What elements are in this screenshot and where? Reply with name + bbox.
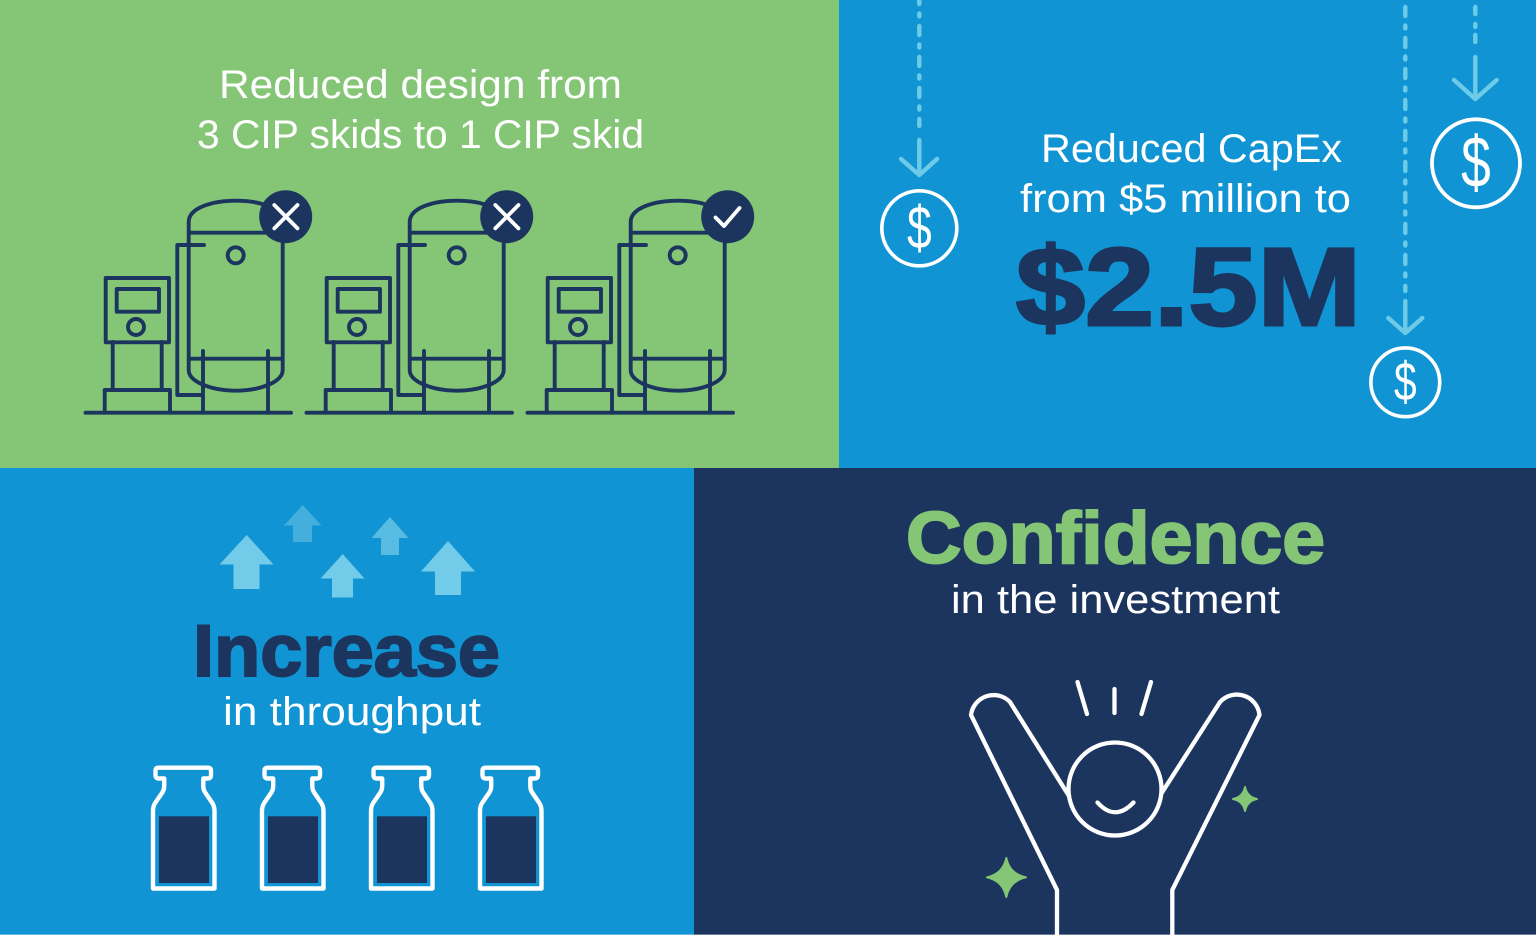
icon: CIP skid 1 crossed out xyxy=(86,190,312,413)
text: reduced CapEx: Reduced CapEx xyxy=(1041,127,1342,171)
heading: reduced design: Reduced design from xyxy=(219,63,622,107)
bottle 1 xyxy=(153,768,214,888)
text: reduced CapEx: from $5 million to xyxy=(1020,177,1351,221)
panel: confidence in the investment xyxy=(694,468,1536,935)
text: reduced CapEx xyxy=(1020,127,1351,221)
panel: increase in throughput xyxy=(0,468,694,935)
bottle 2 xyxy=(262,768,324,888)
arrow: falling right xyxy=(1454,7,1497,99)
text: in the investment: in the investment xyxy=(951,578,1280,622)
heading: reduced design xyxy=(197,63,644,157)
text: in throughput: in throughput xyxy=(223,690,481,734)
icon: dollar coin right xyxy=(1432,119,1520,207)
panel: reduced design xyxy=(0,0,839,468)
icon: cheering person xyxy=(971,682,1260,935)
bottle 4 xyxy=(480,768,542,888)
bottle 3 xyxy=(371,768,432,888)
icon: dollar coin middle: $ xyxy=(1394,352,1417,413)
heading: confidence: Confidence xyxy=(906,498,1325,579)
icon: large sparkle xyxy=(987,858,1026,897)
icon: CIP skid 3 checked xyxy=(528,190,754,413)
icon: dollar coin left: $ xyxy=(907,195,932,262)
icon: small sparkle xyxy=(1233,787,1257,811)
icon: dollar coin middle xyxy=(1371,348,1440,417)
icon: CIP skid 2 crossed out xyxy=(306,190,533,413)
arrow: falling left xyxy=(901,0,937,175)
icon: bottles xyxy=(153,768,542,888)
heading: reduced design: 3 CIP skids to 1 CIP skid xyxy=(197,113,644,157)
heading: increase: Increase xyxy=(193,611,500,692)
arrow: falling middle xyxy=(1388,7,1422,333)
icon: rising arrows xyxy=(220,505,475,598)
figure: $2.5M: $2.5M xyxy=(1016,226,1361,349)
icon: dollar coin right: $ xyxy=(1461,123,1491,203)
icon: dollar coin left xyxy=(882,191,957,266)
panel: reduced CapEx xyxy=(839,0,1536,468)
